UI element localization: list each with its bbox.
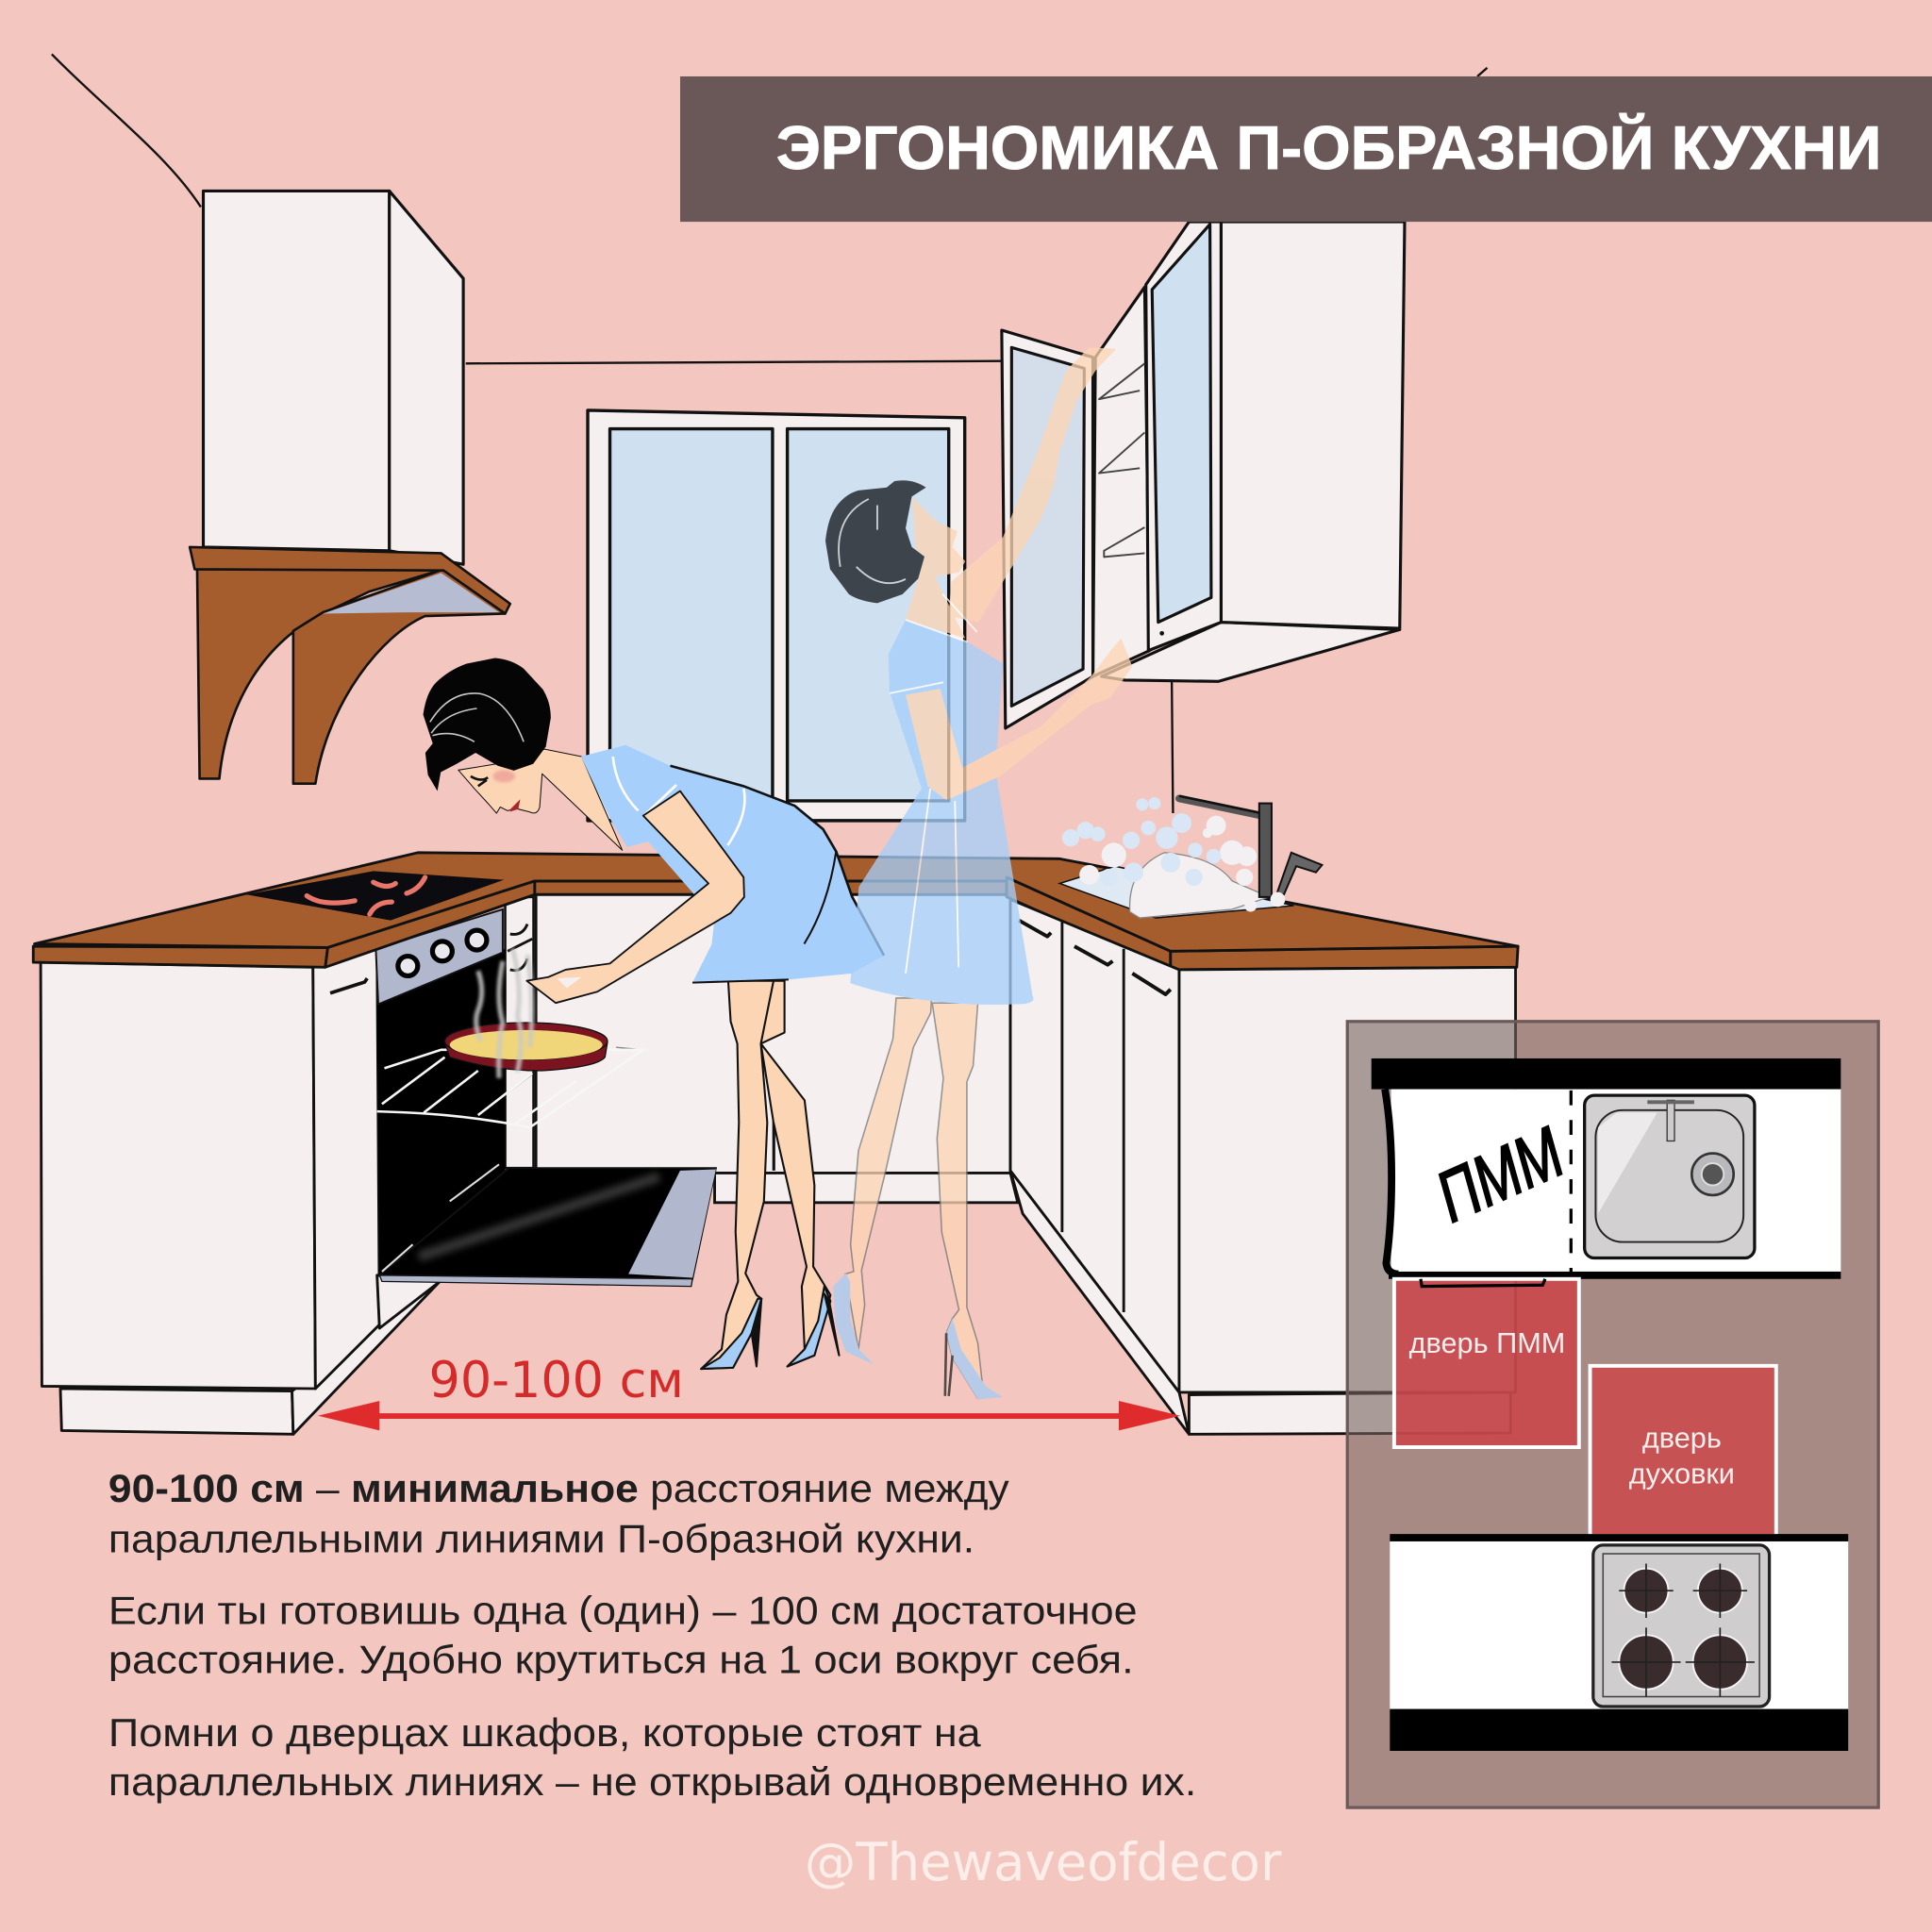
right base cabinets (1010, 899, 1516, 1434)
back base cabinets (536, 894, 1018, 1203)
body text: Если ты готовишь одна (один) – 100 см достаточное (108, 1588, 1138, 1632)
cooktop (246, 871, 504, 921)
body text: расстояние. Удобно крутиться на 1 оси вокруг себя. (108, 1638, 1134, 1682)
right wall cabinet (1002, 222, 1405, 728)
door of oven: духовки (1629, 1457, 1735, 1491)
body text: Помни о дверцах шкафов, которые стоят на (108, 1710, 981, 1755)
body text: 90-100 см – минимальное расстояние между (108, 1466, 1009, 1510)
door of oven: дверь (1642, 1422, 1722, 1455)
bent woman dress (581, 745, 884, 983)
hand gap (557, 977, 581, 989)
standing woman arms (906, 347, 1132, 800)
bent woman head (424, 658, 623, 850)
door of dishwasher: дверь ПММ (1409, 1326, 1565, 1359)
bent woman arm (526, 791, 744, 1003)
woman at the oven (424, 658, 884, 1369)
oven rack (377, 1047, 643, 1127)
sink plan icon (1585, 1095, 1755, 1258)
watermark: @Thewaveofdecor (805, 1832, 1282, 1892)
handwritten label ПММ: ПММ (1425, 1112, 1575, 1238)
standing woman head (906, 496, 965, 639)
dimension arrow (318, 1401, 1180, 1430)
panel: floor plan (1347, 1022, 1878, 1807)
bent woman legs and shoes (701, 981, 839, 1369)
oven door open (379, 1164, 716, 1287)
hob plan icon (1593, 1545, 1770, 1707)
left wall cabinet (204, 191, 463, 564)
body text: параллельными линиями П-образной кухни. (108, 1517, 974, 1561)
baking pan (445, 1023, 608, 1071)
top counter plan (1372, 1058, 1840, 1279)
standing woman legs and shoes (833, 998, 1003, 1399)
wall lines (52, 54, 1487, 813)
standing woman sleeve lines (890, 594, 977, 974)
door of oven (1591, 1366, 1776, 1536)
dimension label: 90-100 см (429, 1353, 684, 1409)
oven body (375, 897, 534, 1276)
woman at the wall cabinet, translucent (825, 347, 1132, 1399)
sink with dishes and bubbles (1059, 796, 1322, 918)
worktop (33, 853, 1518, 970)
title bar (680, 76, 1932, 222)
window (588, 410, 965, 821)
body text (108, 1466, 1196, 1804)
door of dishwasher (1394, 1279, 1579, 1447)
standing woman skirt and bodice (850, 620, 1034, 1005)
left base cabinet (41, 946, 440, 1434)
title bar: ЭРГОНОМИКА П-ОБРАЗНОЙ КУХНИ (776, 113, 1881, 182)
range hood (190, 547, 510, 784)
bent woman dress lines (613, 757, 884, 983)
bottom counter plan (1390, 1534, 1848, 1751)
body text: параллельных линиях – не открывай одновременно их. (108, 1759, 1196, 1804)
steam (476, 949, 532, 1078)
